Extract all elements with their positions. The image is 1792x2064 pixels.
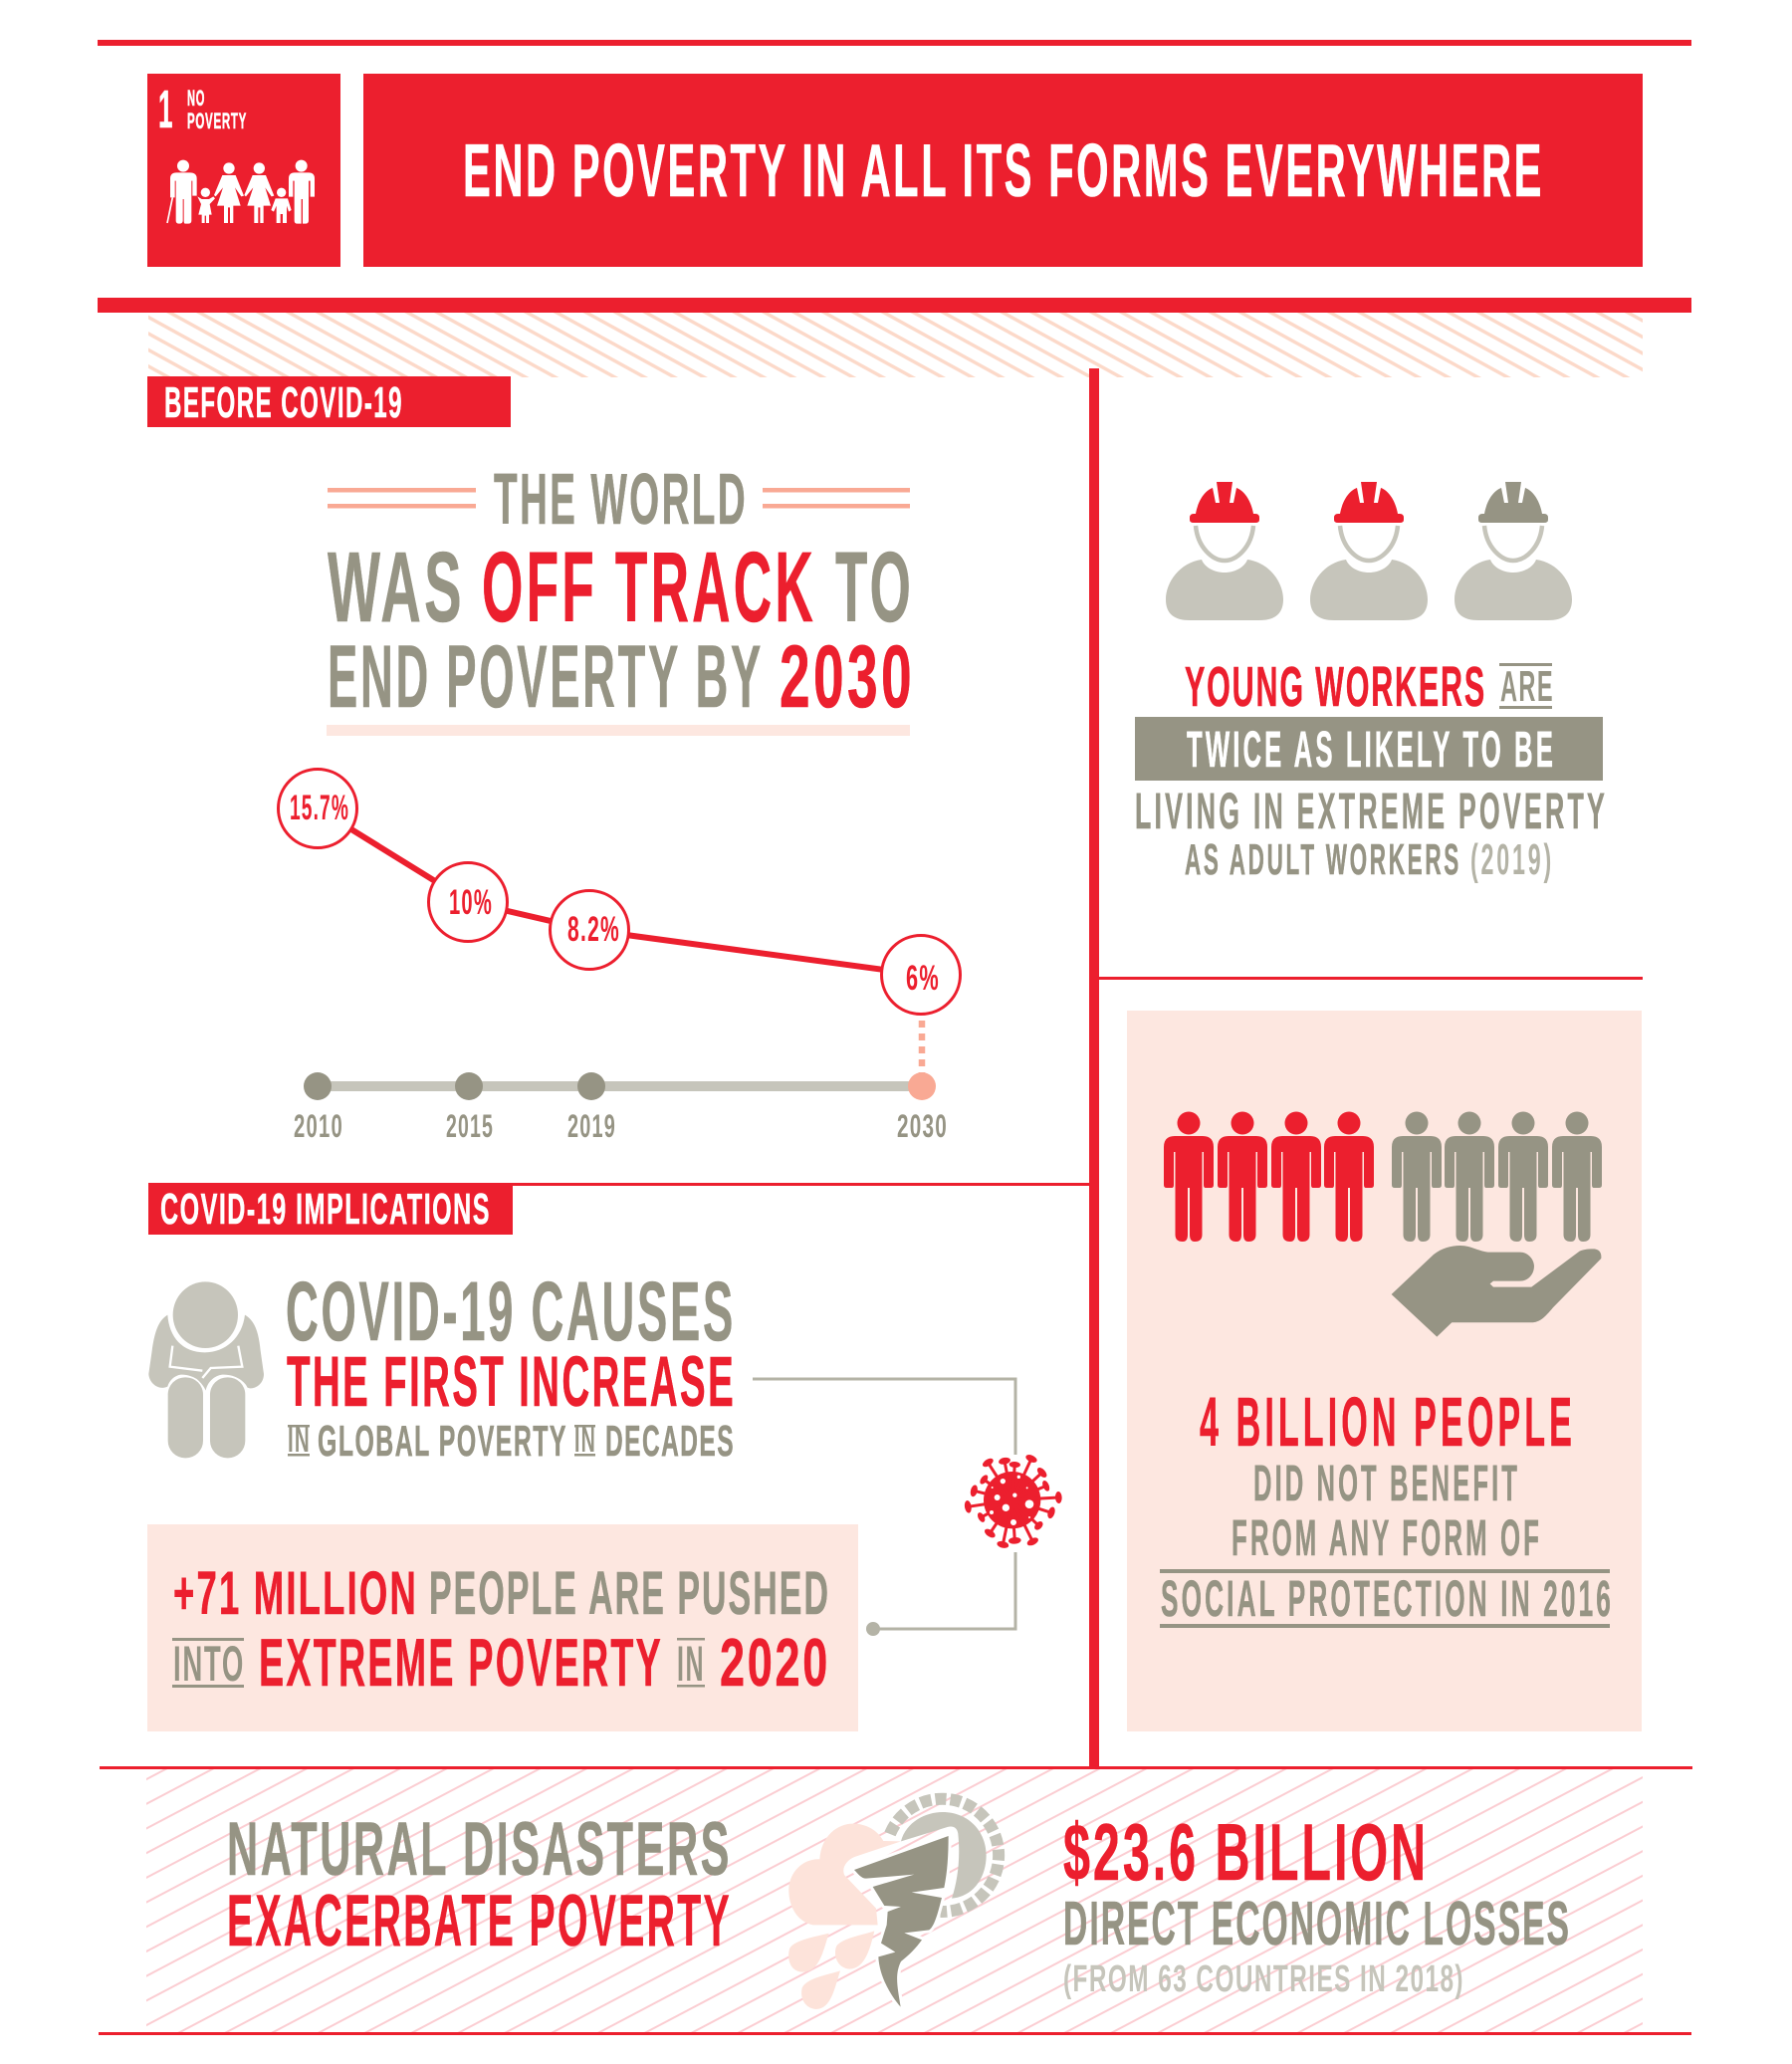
data point: 2010	[279, 769, 356, 848]
line chart: extreme poverty rate 2010-2030	[279, 769, 960, 1144]
section label: before covid-19: BEFORE COVID-19	[164, 379, 403, 427]
text: covid-19 causes the first increase: GLOBAL POVERTY	[318, 1417, 567, 1466]
text: covid-19 causes the first increase	[286, 1264, 736, 1466]
text: young workers are	[1185, 655, 1554, 719]
header rule top	[98, 40, 1691, 46]
text: 23.6 billion direct economic losses: $23.6 BILLION	[1063, 1808, 1429, 1898]
text: covid-19 causes the first increase: DECADES	[605, 1417, 735, 1466]
text: natural disasters exacerbate poverty: NATURAL DISASTERS	[227, 1807, 732, 1892]
section label: covid-19 implications: COVID-19 IMPLICATIONS	[160, 1186, 491, 1234]
timeline axis: 2030	[897, 1108, 948, 1144]
heading line: was off track to	[328, 532, 914, 643]
heading line: end poverty by 2030	[328, 626, 915, 726]
text: did not benefit	[1160, 1455, 1614, 1628]
text: natural disasters exacerbate poverty: EXACERBATE POVERTY	[227, 1881, 732, 1961]
icon: virus	[964, 1453, 1062, 1549]
text: natural disasters exacerbate poverty	[227, 1807, 732, 1961]
timeline axis	[294, 1021, 948, 1144]
panel: 71 million pushed into poverty: +71 MILLION	[173, 1559, 418, 1627]
footer rule bottom	[99, 2032, 1691, 2035]
title banner	[363, 74, 1643, 267]
goal 1 tile: no poverty: 1	[158, 80, 174, 139]
panel: 71 million pushed into poverty	[147, 1524, 858, 1731]
icon: people row	[1164, 1111, 1602, 1242]
hatched band	[148, 313, 1643, 377]
text: young workers are: YOUNG WORKERS	[1185, 655, 1486, 719]
panel: 71 million pushed into poverty: EXTREME POVERTY	[259, 1625, 663, 1701]
goal 1 tile: no poverty: NO	[187, 86, 205, 111]
data point: 2019: 8.2%	[567, 910, 620, 949]
panel: 71 million pushed into poverty: IN	[677, 1636, 705, 1692]
highlight: twice as likely to be	[1135, 717, 1603, 781]
heading accent lines	[328, 488, 910, 508]
text: as adult workers 2019: (2019)	[1470, 835, 1554, 884]
heading line: was off track to: WAS	[328, 532, 465, 643]
panel: 71 million pushed into poverty: 2020	[720, 1625, 830, 1701]
text: covid-19 causes the first increase: IN	[288, 1419, 311, 1460]
data point: 2030: 6%	[906, 959, 940, 998]
goal 1 tile: no poverty	[147, 74, 340, 267]
text: as adult workers 2019	[1185, 835, 1554, 884]
heading line: end poverty by 2030: 2030	[780, 626, 915, 726]
panel: young workers	[1135, 482, 1608, 884]
trend line	[318, 808, 921, 975]
panel: 71 million pushed into poverty: INTO	[173, 1636, 245, 1692]
footer rule top	[100, 1766, 1692, 1769]
icon: three workers	[1166, 482, 1572, 620]
heading line: the world: THE WORLD	[494, 460, 748, 540]
connector arrow	[753, 1379, 1015, 1635]
panel: 4 billion people	[1127, 1011, 1642, 1731]
heading line: was off track to: TO	[835, 532, 914, 643]
text: covid-19 causes the first increase: COVID-19 CAUSES	[286, 1264, 736, 1358]
heading: the world was off track	[327, 460, 915, 736]
data point: 2015: 10%	[449, 883, 493, 922]
timeline axis: 2015	[446, 1108, 494, 1144]
panel: 71 million pushed into poverty: PEOPLE ARE PUSHED	[429, 1559, 830, 1627]
hatched footer band	[146, 1769, 1643, 2032]
goal 1 tile: no poverty: POVERTY	[187, 109, 247, 133]
data point: 2019	[550, 890, 629, 970]
text: as adult workers 2019: AS ADULT WORKERS	[1185, 835, 1461, 884]
icon: sad person	[148, 1281, 264, 1458]
text: 23.6 billion direct economic losses: (FROM 63 COUNTRIES IN 2018)	[1063, 1958, 1464, 2000]
vertical divider	[1089, 368, 1099, 1768]
text: did not benefit: DID NOT BENEFIT	[1253, 1455, 1520, 1511]
heading line: was off track to: OFF TRACK	[482, 532, 816, 643]
text: covid-19 causes the first increase: IN	[574, 1419, 596, 1460]
section label: covid-19 implications	[148, 1183, 513, 1235]
right section divider	[1099, 977, 1643, 980]
data point: 2010: 15.7%	[290, 789, 349, 827]
data point: 2030	[882, 936, 960, 1014]
text: 23.6 billion direct economic losses	[1063, 1808, 1571, 2000]
left section divider	[513, 1183, 1090, 1186]
header rule bottom	[98, 298, 1691, 313]
icon: family	[167, 160, 315, 224]
icon: open hand	[1392, 1246, 1601, 1337]
text: covid-19 causes the first increase: THE FIRST INCREASE	[287, 1343, 736, 1422]
timeline axis: 2019	[567, 1108, 616, 1144]
data point: 2015	[428, 862, 508, 942]
timeline axis: 2010	[294, 1108, 343, 1144]
heading line: end poverty by 2030: END POVERTY BY	[328, 626, 764, 726]
text: young workers are: ARE	[1500, 662, 1554, 711]
icon: storm and tornado	[788, 1799, 999, 2009]
